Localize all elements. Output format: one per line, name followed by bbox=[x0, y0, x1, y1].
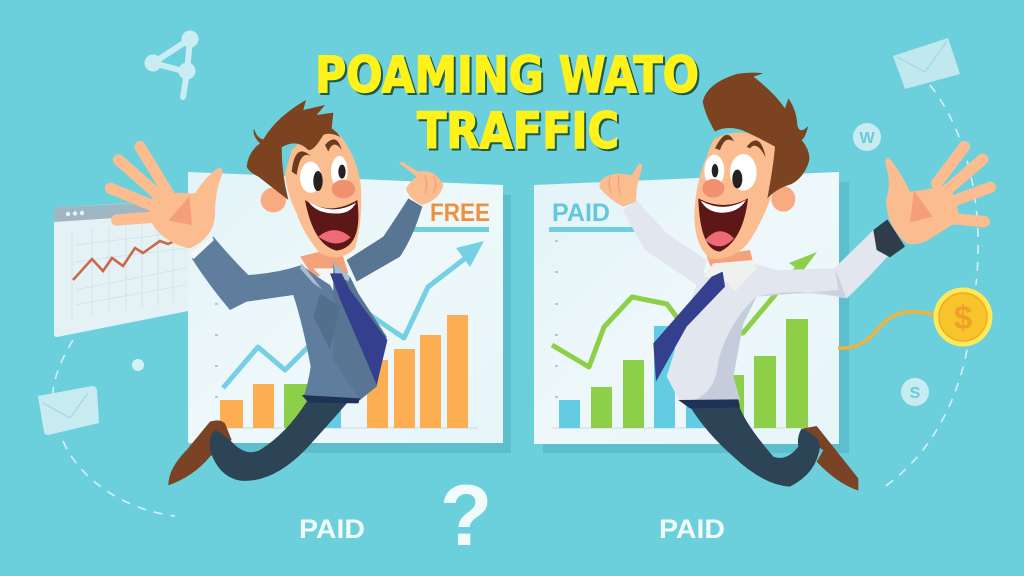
question mark: ? bbox=[440, 468, 492, 564]
title: POAMING WATO bbox=[315, 46, 699, 104]
icon: envelope left bbox=[38, 386, 99, 435]
panel: free traffic chart bbox=[188, 172, 511, 453]
fist bbox=[600, 163, 642, 207]
decorative dot bbox=[132, 359, 144, 371]
nose bbox=[332, 180, 355, 198]
belt bbox=[678, 399, 740, 408]
character: left man bbox=[111, 100, 443, 485]
connector to coin bbox=[838, 312, 935, 348]
open hand bbox=[111, 147, 223, 248]
shoe bbox=[168, 420, 232, 485]
dashed path left bbox=[53, 340, 175, 516]
open mouth bbox=[305, 200, 358, 251]
tie bbox=[330, 273, 387, 385]
bar chart: paid bbox=[559, 319, 808, 428]
hair bbox=[247, 100, 341, 200]
left cuff bbox=[190, 237, 214, 259]
jacket bbox=[192, 237, 387, 400]
trend line arrow: free bbox=[223, 241, 484, 388]
icon: S badge: S bbox=[910, 385, 921, 402]
eyebrows bbox=[715, 135, 766, 157]
neck bbox=[300, 247, 348, 277]
open hand bbox=[885, 147, 990, 244]
panel: paid traffic chart bbox=[534, 172, 849, 453]
shoe bbox=[800, 426, 858, 491]
icon: network nodes bbox=[145, 31, 198, 97]
browser window chart bbox=[54, 200, 193, 337]
shirt bbox=[313, 268, 345, 307]
icon: W badge: W bbox=[859, 130, 875, 147]
trousers bbox=[210, 402, 348, 481]
dashed path right bbox=[880, 85, 978, 490]
jacket hem bbox=[302, 395, 360, 403]
icon: W badge bbox=[853, 123, 881, 151]
label: left PAID: PAID bbox=[299, 514, 365, 544]
icon: S badge bbox=[901, 378, 929, 406]
character: right man bbox=[600, 73, 990, 491]
collar bbox=[703, 260, 757, 292]
collar bbox=[300, 262, 350, 290]
icon: envelope top right bbox=[893, 38, 960, 89]
eyes bbox=[704, 154, 757, 191]
face bbox=[694, 132, 778, 259]
ear bbox=[771, 186, 795, 212]
palm crease bbox=[168, 196, 192, 225]
shirt and arms bbox=[623, 200, 893, 402]
label: PAID: PAID bbox=[552, 199, 610, 227]
palm crease bbox=[910, 191, 933, 222]
ear bbox=[261, 188, 286, 212]
icon: gold coin: $ bbox=[954, 299, 972, 336]
watch cuff bbox=[873, 219, 905, 257]
tie bbox=[653, 272, 725, 382]
face bbox=[285, 133, 361, 257]
neck bbox=[707, 250, 753, 273]
right arm sleeve bbox=[347, 198, 422, 282]
eyebrows bbox=[292, 139, 342, 175]
title bbox=[315, 46, 699, 160]
open mouth bbox=[698, 198, 748, 252]
trend line arrow: paid bbox=[552, 252, 817, 367]
trousers bbox=[690, 403, 820, 487]
hair bbox=[703, 73, 809, 198]
label: FREE: FREE bbox=[430, 199, 490, 227]
fist bbox=[399, 162, 443, 205]
eyes bbox=[300, 156, 348, 193]
nose bbox=[702, 179, 724, 198]
bar chart: free bbox=[220, 315, 468, 428]
label: right PAID: PAID bbox=[659, 514, 725, 544]
icon: gold coin bbox=[934, 288, 992, 346]
title: TRAFFIC bbox=[417, 102, 619, 160]
